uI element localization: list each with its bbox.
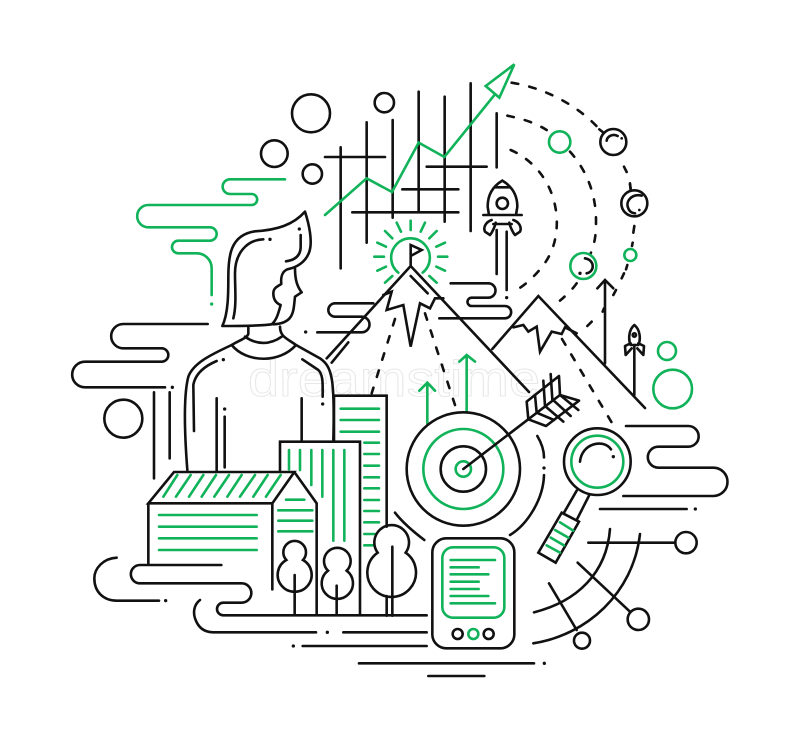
watermark: dreamstime bbox=[248, 351, 540, 407]
flag bbox=[411, 245, 422, 265]
dashed mountain paths bbox=[372, 313, 612, 423]
magnifying glass bbox=[538, 428, 631, 563]
small mountain bbox=[492, 296, 645, 408]
green up arrows bbox=[419, 355, 475, 423]
decorative circles top left bbox=[261, 93, 394, 184]
arcs around target bbox=[395, 436, 546, 540]
chart grid bbox=[325, 83, 497, 268]
face bbox=[273, 268, 302, 324]
planet right bbox=[621, 183, 647, 216]
hair bbox=[222, 212, 311, 326]
tree 3 bbox=[367, 525, 416, 616]
planet green with crescent bbox=[570, 253, 596, 279]
sun rays and sun bbox=[374, 221, 447, 283]
hair inner strands bbox=[233, 235, 301, 318]
planet top bbox=[599, 129, 626, 155]
big mountain bbox=[327, 245, 529, 392]
target bbox=[407, 412, 520, 526]
neck and collar bbox=[232, 327, 296, 359]
middle tower bbox=[280, 442, 360, 615]
green circles right bbox=[653, 342, 692, 408]
cloud right bbox=[600, 426, 727, 511]
tree 1 bbox=[278, 541, 312, 615]
torso bbox=[185, 345, 334, 470]
green circle on orbit bbox=[549, 131, 636, 261]
dashed orbits bbox=[507, 83, 634, 326]
ground clouds and lines bbox=[94, 558, 546, 676]
large rocket bbox=[483, 181, 522, 299]
house bbox=[148, 472, 317, 615]
black up arrow bbox=[597, 280, 613, 363]
left circle and lines bbox=[104, 392, 302, 478]
black cloud left bbox=[72, 324, 208, 389]
green growth arrow bbox=[325, 64, 514, 215]
green cloud bbox=[137, 179, 285, 306]
person bbox=[185, 212, 334, 470]
cloud beside rocket bbox=[439, 283, 511, 318]
arrow in target bbox=[463, 374, 579, 469]
snow cap bbox=[383, 292, 443, 347]
tablet bbox=[432, 538, 514, 648]
small rocket bbox=[625, 325, 644, 395]
black cloud centre bbox=[304, 303, 373, 334]
tree 2 bbox=[322, 548, 353, 615]
network arcs and nodes bbox=[533, 529, 697, 649]
tall tower bbox=[334, 396, 387, 545]
